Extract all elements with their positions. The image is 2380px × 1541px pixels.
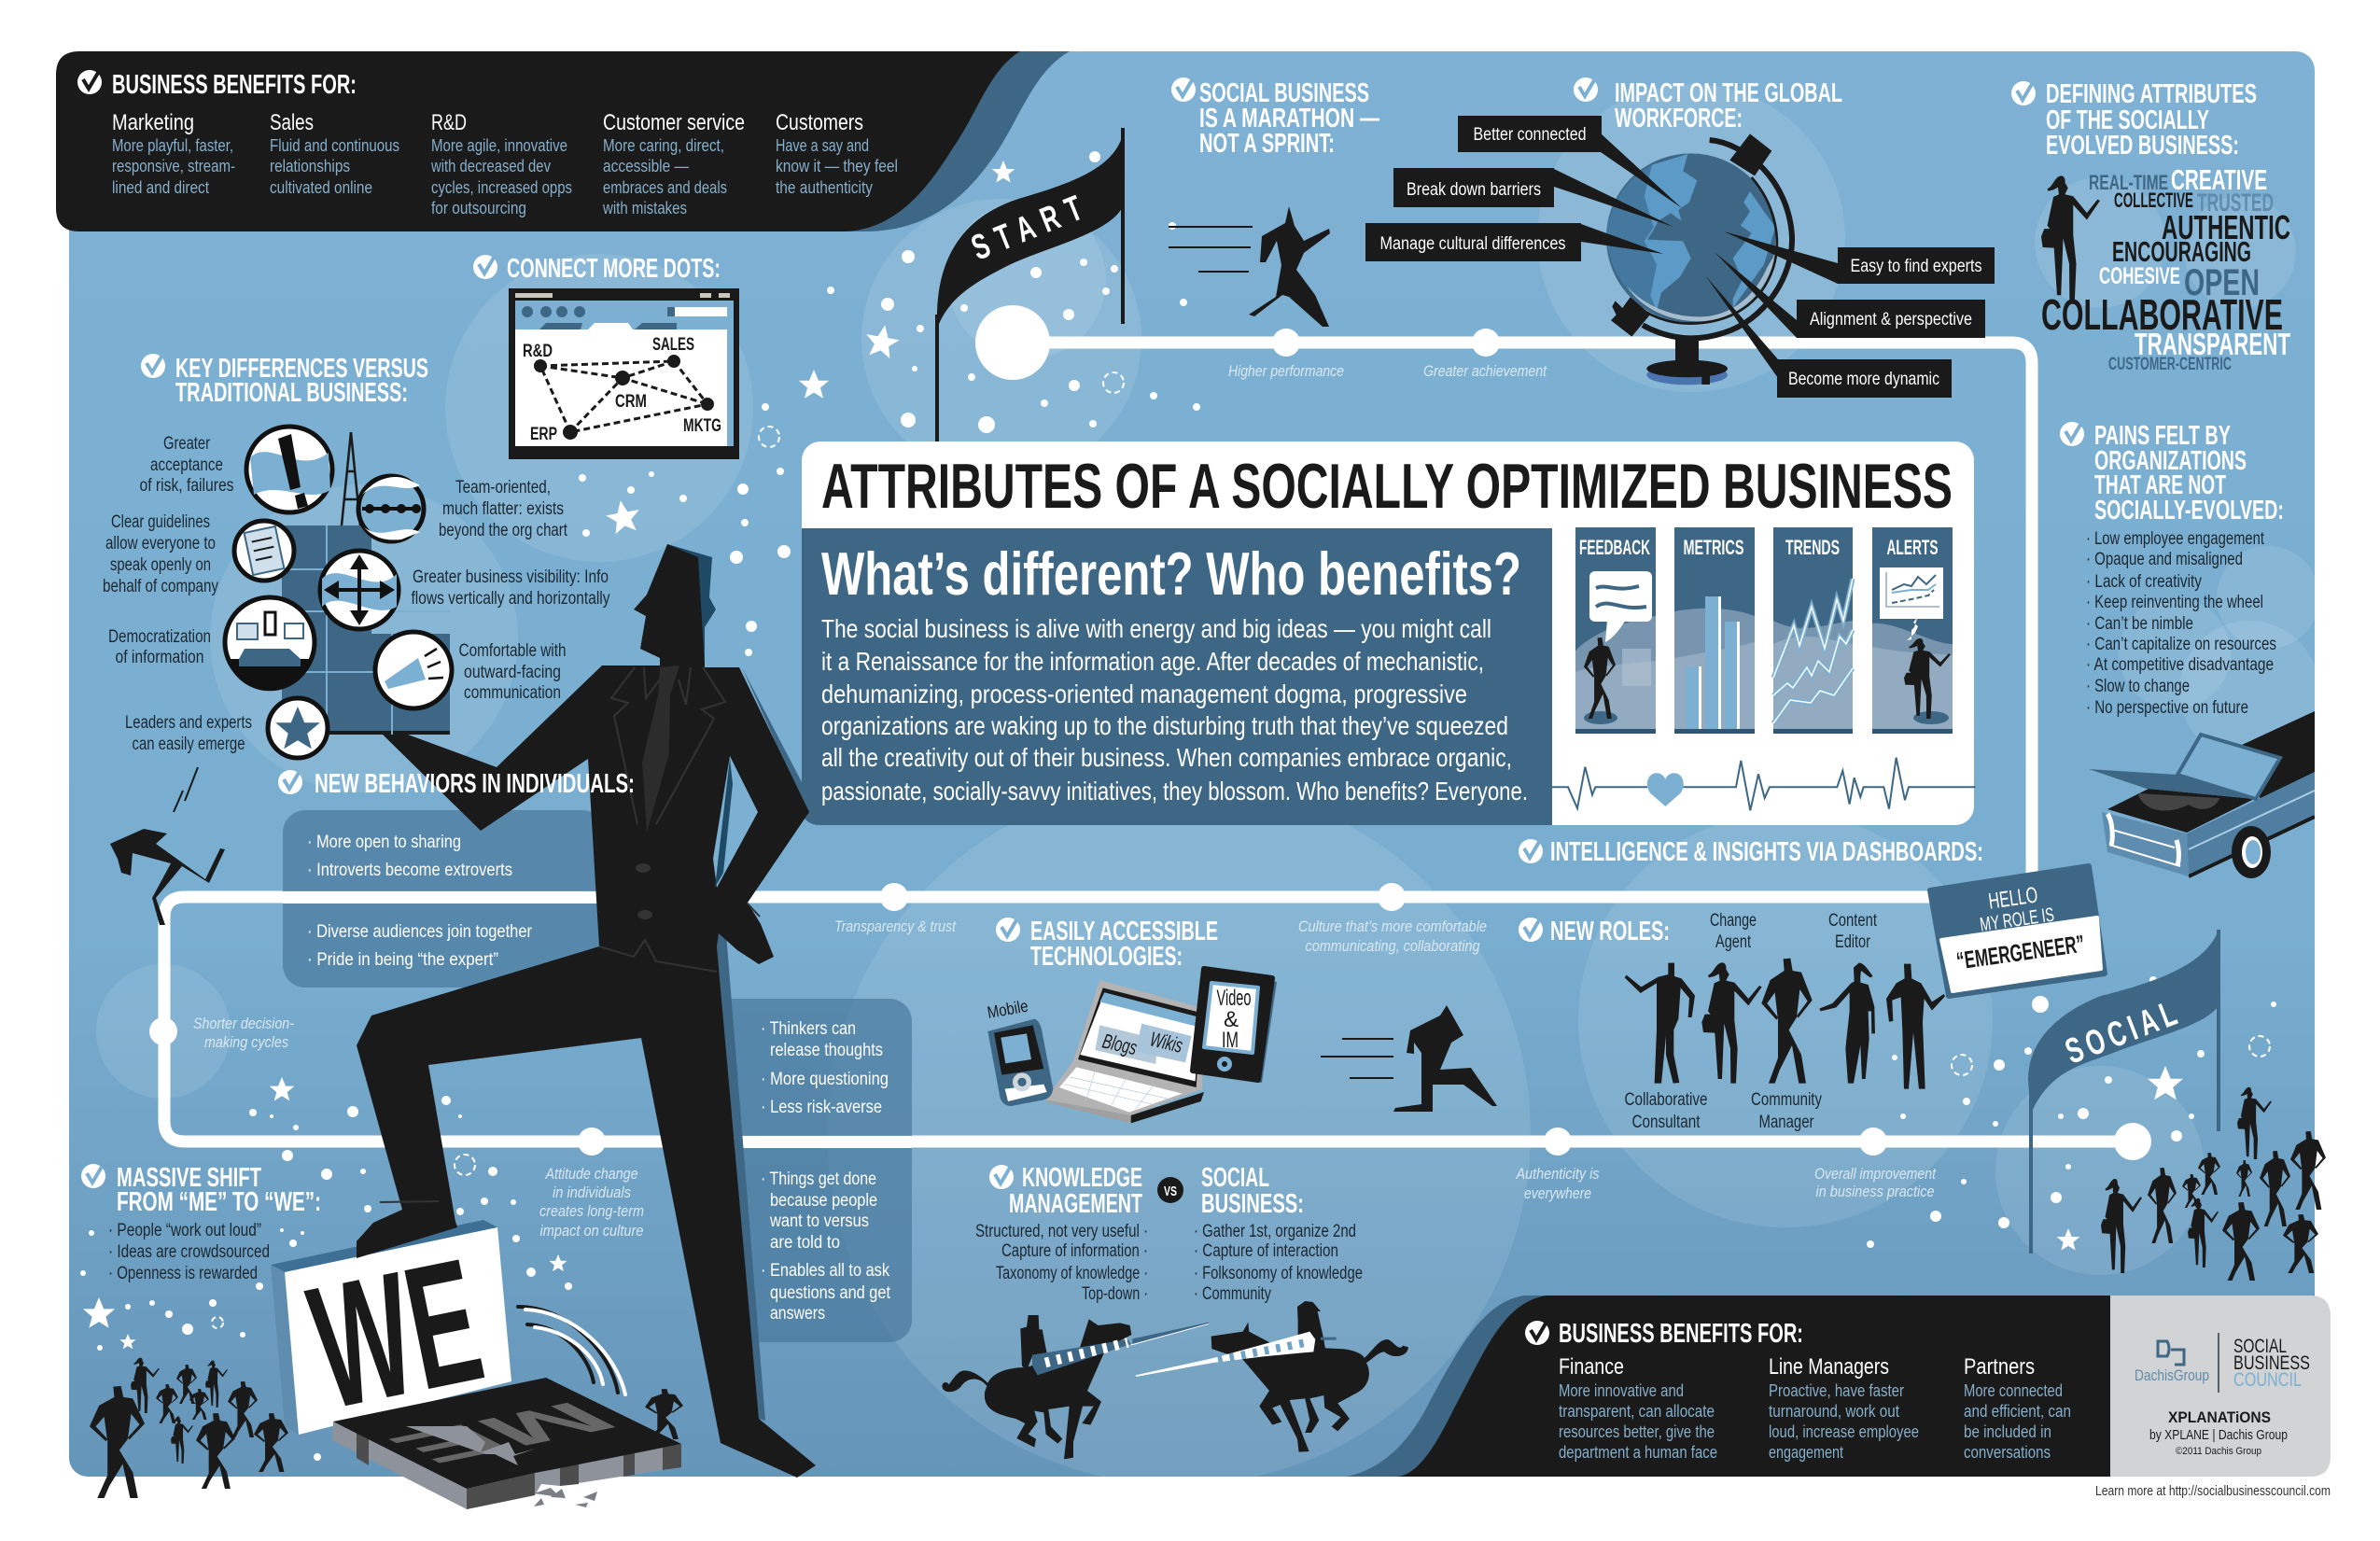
icon: flat team	[358, 476, 424, 541]
workforce callouts: Alignment & perspective	[1810, 310, 1972, 329]
massive shift list	[108, 1221, 270, 1283]
track captions: in business practice	[1816, 1183, 1934, 1200]
bottom benefits bar: be included in	[1964, 1422, 2051, 1441]
browser network diagram: ERP	[530, 425, 557, 444]
thinkers dark panel	[709, 999, 912, 1342]
track captions: creates long-term	[539, 1202, 644, 1220]
white journey track	[164, 343, 2127, 1142]
heading: social business marathon: NOT A SPRINT:	[1199, 129, 1335, 159]
role labels: Community	[1751, 1090, 1822, 1110]
icon: star	[268, 698, 328, 758]
role labels: Collaborative	[1624, 1090, 1708, 1110]
jousting knights	[942, 1301, 1408, 1459]
tablet device: &	[1224, 1007, 1239, 1032]
top benefits bar: cycles, increased opps	[431, 178, 572, 197]
icon captions: Clear guidelines	[111, 512, 210, 532]
icon captions: Team-oriented,	[455, 478, 551, 497]
heading: social business marathon: IS A MARATHON —	[1199, 104, 1379, 133]
woman beside word cloud	[2041, 175, 2100, 300]
thinkers list: because people	[770, 1191, 877, 1211]
new behaviours list: · Pride in being “the expert”	[307, 950, 498, 970]
WE poster: WE	[296, 1221, 496, 1446]
word cloud: TRANSPARENT	[2135, 327, 2290, 361]
top benefits bar: Customer service	[603, 110, 745, 135]
bottom benefits bar: Partners	[1964, 1354, 2035, 1380]
falling woman	[110, 767, 225, 925]
top benefits bar: relationships	[270, 157, 350, 175]
logo panel: XPLANATiONS	[2168, 1408, 2271, 1426]
new behaviours list: · Introverts become extroverts	[307, 861, 512, 880]
SOCIAL flag	[2028, 930, 2220, 1254]
pains list: · No perspective on future	[2086, 698, 2248, 718]
suit details	[380, 667, 760, 1202]
top benefits bar: R&D	[431, 110, 467, 135]
top benefits bar: cultivated online	[270, 178, 372, 197]
heading: accessible technologies: TECHNOLOGIES:	[1030, 942, 1183, 972]
bottom benefits bar: turnaround, work out	[1769, 1402, 1899, 1421]
bottom benefits bar: More innovative and	[1559, 1381, 1684, 1400]
left knight	[942, 1315, 1209, 1459]
building block	[282, 525, 450, 735]
heading: impact on global workforce: IMPACT ON THE GLOBAL	[1615, 78, 1842, 108]
workforce callouts: Easy to find experts	[1850, 257, 1982, 276]
intro paragraph: The social business is alive with energy and big ideas — you might call	[821, 614, 1491, 643]
top benefits bar: embraces and deals	[603, 178, 727, 197]
heading: massive shift: MASSIVE SHIFT	[117, 1163, 261, 1193]
role labels: Editor	[1835, 932, 1871, 952]
heading: impact on global workforce: WORKFORCE:	[1615, 104, 1743, 133]
browser network diagram	[509, 288, 739, 459]
icon captions: Democratization	[108, 627, 211, 647]
heading: key differences	[141, 354, 428, 408]
icon captions: much flatter: exists	[442, 499, 564, 519]
top benefits bar: with decreased dev	[430, 157, 551, 175]
track captions: impact on culture	[539, 1222, 644, 1240]
bottom benefits bar: conversations	[1964, 1443, 2051, 1462]
heading: defining attributes	[2011, 79, 2257, 161]
name tag: “EMERGENEER”	[1954, 930, 2086, 975]
heading: key differences: KEY DIFFERENCES VERSUS	[175, 354, 428, 384]
heading: defining attributes: EVOLVED BUSINESS:	[2046, 131, 2239, 161]
thinkers list: · More questioning	[761, 1070, 889, 1089]
browser network diagram: CRM	[615, 392, 647, 412]
top benefits bar: with mistakes	[602, 199, 687, 217]
logo panel: by XPLANE | Dachis Group	[2149, 1427, 2288, 1443]
top benefits bar	[56, 51, 1070, 231]
pains list: · Opaque and misaligned	[2086, 550, 2243, 569]
logo panel: DachisGroup	[2135, 1366, 2209, 1384]
businessman silhouette	[357, 544, 816, 1478]
broken ME slab: ME	[369, 1394, 639, 1473]
knowledge management list: Structured, not very useful ·	[975, 1222, 1148, 1241]
icon captions: behalf of company	[103, 577, 218, 596]
track captions: Shorter decision-	[193, 1015, 294, 1032]
main title: ATTRIBUTES OF A SOCIALLY OPTIMIZED BUSINESS	[821, 451, 1953, 522]
intro paragraph: passionate, socially-savvy initiatives, they blossom. Who benefits? Everyone.	[821, 777, 1528, 806]
logo panel: SOCIAL	[2233, 1336, 2287, 1357]
heading: knowledge management	[989, 1163, 1142, 1219]
column: alerts: ALERTS	[1887, 536, 1938, 559]
pains list: · Low employee engagement	[2086, 529, 2265, 549]
logo panel: COUNCIL	[2233, 1369, 2302, 1391]
tower	[342, 432, 360, 525]
heading: pains felt: PAINS FELT BY	[2094, 421, 2231, 451]
name tag: MY ROLE IS	[1979, 904, 2055, 936]
thinkers list: questions and get	[770, 1283, 891, 1303]
workforce callouts: Become more dynamic	[1788, 370, 1939, 389]
track captions: communicating, collaborating	[1305, 937, 1480, 955]
track captions: making cycles	[204, 1033, 288, 1051]
START flag: START	[966, 188, 1088, 268]
START flag	[935, 128, 1125, 441]
social business list: · Gather 1st, organize 2nd	[1194, 1222, 1356, 1241]
logo panel	[2110, 1296, 2331, 1477]
top benefits bar: responsive, stream-	[112, 157, 235, 175]
track captions	[193, 362, 1937, 1240]
knowledge management list	[975, 1222, 1148, 1304]
track nodes	[149, 305, 2151, 1160]
thinkers list	[761, 1019, 891, 1324]
top benefits bar: know it — they feel	[776, 157, 898, 175]
heading: pains felt: THAT ARE NOT	[2094, 470, 2226, 500]
laptop: Blogs	[1100, 1030, 1140, 1059]
heading: defining attributes: OF THE SOCIALLY	[2046, 105, 2209, 135]
laptop	[1045, 980, 1204, 1123]
track captions: Authenticity is	[1516, 1165, 1600, 1183]
icon captions: beyond the org chart	[439, 521, 568, 540]
track captions: Higher performance	[1228, 362, 1344, 380]
word cloud: CUSTOMER-CENTRIC	[2108, 355, 2232, 374]
social business list: · Community	[1194, 1284, 1271, 1304]
runner	[1321, 1005, 1497, 1112]
sub title: What’s different? Who benefits?	[821, 539, 1521, 608]
track captions: Attitude change	[545, 1165, 638, 1183]
bottom benefits bar: Proactive, have faster	[1769, 1381, 1904, 1400]
crowd bottom left	[90, 1358, 288, 1498]
workforce callouts: Manage cultural differences	[1379, 234, 1566, 254]
column: metrics	[1674, 527, 1755, 734]
icon: exclamation	[246, 427, 332, 512]
word cloud: CREATIVE	[2171, 163, 2267, 196]
globe	[1606, 133, 1792, 385]
pains list: · Keep reinventing the wheel	[2086, 593, 2263, 612]
right knight	[1136, 1301, 1408, 1452]
foot on poster	[357, 1210, 457, 1258]
heading: connect more dots	[473, 254, 721, 284]
role labels: Content	[1828, 911, 1878, 931]
crowd bottom right	[2101, 1087, 2326, 1281]
bottom benefits bar: department a human face	[1559, 1443, 1717, 1462]
pains list: · Lack of creativity	[2086, 572, 2202, 592]
thinkers list: · Enables all to ask	[761, 1261, 889, 1281]
icon captions: of information	[116, 648, 203, 667]
intro paragraph	[821, 614, 1528, 806]
top benefits bar: More caring, direct,	[603, 136, 724, 155]
intro paragraph: all the creativity out of their business. When companies embrace organic,	[821, 743, 1512, 772]
thinkers list: · Thinkers can	[761, 1019, 856, 1039]
icon captions	[103, 434, 610, 754]
massive shift list: · People “work out loud”	[108, 1221, 261, 1240]
small man on slab	[645, 1389, 683, 1439]
pains list: · Slow to change	[2086, 677, 2190, 696]
top benefits bar: Sales	[270, 110, 314, 135]
bottom benefits bar: Line Managers	[1769, 1354, 1889, 1380]
top benefits bar: accessible —	[603, 157, 689, 175]
heading: pains felt: SOCIALLY-EVOLVED:	[2094, 496, 2284, 525]
word cloud: COHESIVE	[2099, 263, 2180, 289]
icon captions: of risk, failures	[140, 476, 233, 496]
column: feedback: FEEDBACK	[1579, 536, 1650, 559]
word cloud: AUTHENTIC	[2162, 208, 2290, 246]
tablet device	[1193, 969, 1277, 1083]
track captions: Greater achievement	[1423, 362, 1547, 380]
main centre panel	[802, 441, 1974, 825]
broken ME slab	[332, 1378, 681, 1509]
intro paragraph: it a Renaissance for the information age. After decades of mechanistic,	[821, 647, 1484, 676]
track captions: Transparency & trust	[834, 918, 957, 935]
heading: accessible technologies: EASILY ACCESSIBLE	[1030, 917, 1218, 946]
heading: massive shift: FROM “ME” TO “WE”:	[117, 1187, 321, 1217]
heartbeat line with heart	[1552, 758, 1976, 810]
knowledge management list: Top-down ·	[1082, 1284, 1148, 1304]
top benefits bar: Marketing	[112, 110, 194, 135]
footer link text: Learn more at http://socialbusinesscouncil.com	[2095, 1483, 2331, 1499]
role labels	[1624, 911, 1878, 1132]
heading: accessible technologies	[996, 917, 1218, 972]
column: alerts	[1872, 527, 1953, 734]
social business list	[1194, 1222, 1363, 1304]
versus badge	[1157, 1177, 1183, 1203]
versus badge: VS	[1164, 1184, 1177, 1199]
impact swoosh	[518, 1307, 625, 1394]
icon captions: Greater business visibility: Info	[413, 567, 609, 587]
top benefits bar: Have a say and	[776, 136, 869, 155]
icon: four way arrows	[320, 551, 399, 629]
heading: knowledge management: MANAGEMENT	[1009, 1189, 1142, 1219]
track captions: everywhere	[1524, 1184, 1591, 1202]
massive shift list: · Ideas are crowdsourced	[108, 1242, 270, 1262]
massive shift list: · Openness is rewarded	[108, 1264, 258, 1283]
icon captions: communication	[464, 683, 561, 703]
laptop: Wikis	[1148, 1028, 1185, 1058]
mobile phone	[986, 997, 1053, 1106]
browser network diagram: R&D	[523, 342, 553, 361]
sprinter	[1169, 206, 1330, 327]
track captions: Culture that’s more comfortable	[1298, 918, 1487, 935]
word cloud: REAL-TIME	[2089, 171, 2168, 194]
building with icons	[225, 427, 452, 758]
bottom benefits bar: loud, increase employee	[1769, 1422, 1919, 1441]
bottom benefits bar	[1346, 1296, 2110, 1477]
workforce callouts: Better connected	[1473, 125, 1587, 145]
icon captions: flows vertically and horizontally	[411, 589, 610, 609]
top benefits bar: More agile, innovative	[431, 136, 567, 155]
heading: knowledge management: KNOWLEDGE	[1022, 1163, 1142, 1193]
heading: new roles: NEW ROLES:	[1550, 917, 1670, 946]
top benefits bar: BUSINESS BENEFITS FOR:	[112, 70, 357, 100]
heading: new behaviors: NEW BEHAVIORS IN INDIVIDUALS:	[315, 769, 635, 799]
role labels: Change	[1710, 911, 1757, 931]
name tag: HELLO	[1987, 883, 2039, 915]
heading: social business: SOCIAL	[1201, 1163, 1269, 1193]
column: trends: TRENDS	[1785, 536, 1840, 559]
new behaviours list: · More open to sharing	[307, 833, 461, 852]
heading: pains felt	[2060, 421, 2284, 525]
heading: social business	[1201, 1163, 1304, 1219]
top benefits bar: Customers	[776, 110, 863, 135]
thinkers list: · Things get done	[761, 1170, 876, 1189]
bottom benefits bar: resources better, give the	[1559, 1422, 1715, 1441]
icon captions: outward-facing	[464, 663, 561, 682]
icon captions: can easily emerge	[133, 735, 245, 754]
heading: key differences: TRADITIONAL BUSINESS:	[175, 378, 408, 408]
heading: intelligence and insights: INTELLIGENCE & INSIGHTS VIA DASHBOARDS:	[1550, 837, 1983, 867]
bottom benefits bar: Finance	[1559, 1354, 1624, 1380]
workforce callouts: Break down barriers	[1407, 180, 1541, 200]
column: trends	[1773, 527, 1853, 734]
heading: new roles	[1519, 917, 1670, 946]
role labels: Manager	[1758, 1113, 1814, 1132]
heading: social business marathon	[1171, 77, 1379, 159]
bottom benefits bar: transparent, can allocate	[1559, 1402, 1715, 1421]
knowledge management list: Taxonomy of knowledge ·	[996, 1264, 1148, 1283]
WE poster	[271, 1220, 511, 1446]
word cloud: TRUSTED	[2197, 189, 2274, 217]
icon captions: acceptance	[150, 455, 223, 475]
thinkers list: answers	[770, 1304, 825, 1324]
intro paragraph: dehumanizing, process-oriented management dogma, progressive	[821, 679, 1467, 708]
tablet device: IM	[1222, 1028, 1239, 1053]
tablet device: Video	[1217, 986, 1251, 1011]
role labels: Agent	[1715, 932, 1752, 952]
dashboard columns	[1575, 527, 1953, 734]
intro paragraph: organizations are waking up to the disturbing truth that they’ve squeezed	[821, 711, 1508, 740]
name tag	[1930, 866, 2105, 996]
browser network diagram: MKTG	[683, 416, 721, 436]
knowledge management list: Capture of information ·	[1001, 1241, 1148, 1261]
icon captions: Leaders and experts	[125, 713, 252, 733]
word cloud: OPEN	[2184, 262, 2260, 303]
icon: megaphone	[375, 632, 452, 708]
heading: defining attributes: DEFINING ATTRIBUTES	[2046, 79, 2257, 109]
heading: new behaviors	[278, 769, 635, 799]
track over behaviours panel	[283, 891, 605, 904]
bottom benefits bar: engagement	[1769, 1443, 1843, 1462]
icon: clipboard	[234, 521, 294, 581]
thinkers list: release thoughts	[770, 1041, 883, 1060]
pains list: · Can’t be nimble	[2086, 614, 2193, 634]
social business list: · Folksonomy of knowledge	[1194, 1264, 1363, 1283]
mobile phone: Mobile	[986, 997, 1029, 1022]
icon captions: allow everyone to	[105, 534, 216, 553]
heading: social business: BUSINESS:	[1201, 1189, 1304, 1219]
top benefits bar: Fluid and continuous	[270, 136, 399, 155]
social business list: · Capture of interaction	[1194, 1241, 1338, 1261]
top benefits bar: for outsourcing	[431, 199, 526, 217]
top benefits bar: lined and direct	[112, 178, 209, 197]
column: feedback	[1575, 527, 1656, 734]
logo panel: BUSINESS	[2233, 1352, 2310, 1374]
thinkers list: want to versus	[769, 1212, 869, 1231]
new behaviours list: · Diverse audiences join together	[307, 922, 533, 942]
pains list	[2086, 529, 2276, 718]
role labels: Consultant	[1631, 1113, 1701, 1132]
heading: massive shift	[81, 1163, 321, 1217]
icon captions: Greater	[163, 434, 211, 454]
thinkers list: are told to	[770, 1233, 840, 1253]
bottom benefits bar: BUSINESS BENEFITS FOR:	[1559, 1319, 1803, 1349]
scattered stars and dots	[80, 151, 2276, 1461]
heading: pains felt: ORGANIZATIONS	[2094, 446, 2247, 476]
heading: intelligence and insights	[1519, 837, 1983, 867]
logo panel: ©2011 Dachis Group	[2176, 1446, 2261, 1457]
heading: impact on global workforce	[1574, 77, 1842, 133]
heading: social business marathon: SOCIAL BUSINESS	[1199, 78, 1369, 108]
heading: connect more dots: CONNECT MORE DOTS:	[507, 254, 721, 284]
word cloud	[2041, 163, 2290, 374]
thinkers list: · Less risk-averse	[761, 1098, 882, 1117]
icon captions: Comfortable with	[459, 641, 566, 661]
track captions: Overall improvement	[1814, 1165, 1937, 1183]
workforce callouts	[1365, 116, 1995, 398]
column: metrics: METRICS	[1684, 536, 1743, 559]
icon captions: speak openly on	[110, 555, 211, 575]
track captions: in individuals	[553, 1184, 631, 1201]
icon: democratization	[225, 597, 315, 691]
SOCIAL flag: SOCIAL	[2060, 993, 2182, 1072]
top benefits bar: the authenticity	[776, 178, 873, 197]
pains list: · At competitive disadvantage	[2086, 655, 2274, 675]
top benefits bar: More playful, faster,	[112, 136, 233, 155]
new behaviours dark panel	[283, 810, 605, 988]
track over thinkers panel	[709, 1136, 912, 1148]
word cloud: COLLECTIVE	[2114, 189, 2193, 212]
new behaviours list	[307, 833, 533, 970]
bottom benefits bar: and efficient, can	[1964, 1402, 2071, 1421]
role figures	[1625, 959, 1945, 1089]
pains list: · Can’t capitalize on resources	[2086, 635, 2276, 654]
broken down car	[2089, 711, 2315, 878]
bottom benefits bar: More connected	[1964, 1381, 2063, 1400]
browser network diagram: SALES	[652, 335, 694, 355]
word cloud: ENCOURAGING	[2112, 235, 2251, 268]
